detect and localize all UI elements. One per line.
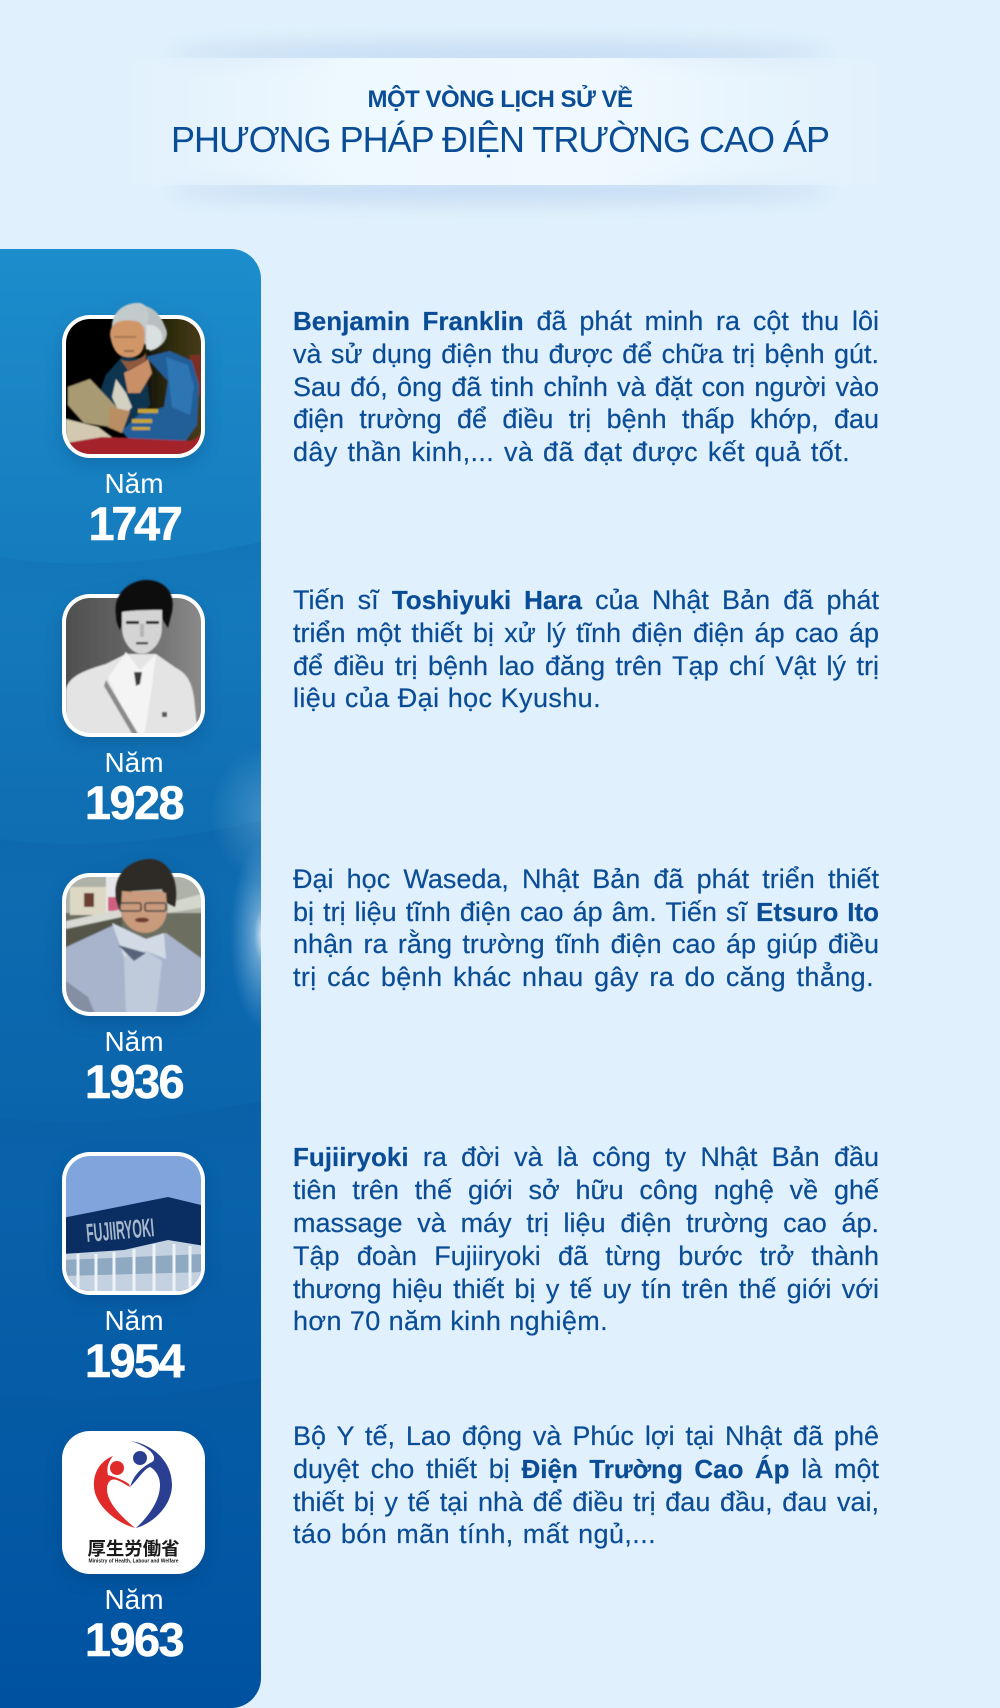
logo mark: heart of two figures (94, 1441, 172, 1528)
text block 1936: nhận ra rằng trường tĩnh điện cao áp giúp điều (293, 929, 879, 959)
year label 1936: 1936 (85, 1055, 183, 1108)
text block 1928: liệu của Đại học Kyushu. (293, 683, 601, 713)
item 1936: photo and year (60, 858, 206, 1108)
photo: Etsuro Ito portrait (60, 858, 206, 1024)
logo text: kanji name: 厚生労働省 (88, 1535, 179, 1561)
text block 1954: Fujiiryoki ra đời và là công ty Nhật Bản đầu (293, 1142, 879, 1172)
text block 1963: Bộ Y tế, Lao động và Phúc lợi tại Nhật đã phê (293, 1421, 879, 1451)
text block 1954: hơn 70 năm kinh nghiệm. (293, 1306, 608, 1336)
heading: main line: PHƯƠNG PHÁP ĐIỆN TRƯỜNG CAO ÁP (171, 119, 829, 160)
text block 1954: thương hiệu thiết bị y tế uy tín trên thế giới với (293, 1274, 879, 1304)
year label 1954: 1954 (85, 1334, 183, 1387)
text block 1954 (293, 1142, 879, 1336)
text block 1954: massage và máy trị liệu điện trường cao áp. (293, 1208, 879, 1238)
text block 1928: Tiến sĩ Toshiyuki Hara của Nhật Bản đã phát (293, 585, 879, 615)
item 1747: photo and year (58, 302, 209, 550)
text block 1954: Tập đoàn Fujiiryoki đã từng bước trở thành (293, 1241, 879, 1271)
year label 1936: Năm (104, 1026, 164, 1057)
photo: Toshiyuki Hara portrait (60, 578, 208, 745)
text block 1963: duyệt cho thiết bị Điện Trường Cao Áp là một (293, 1454, 879, 1484)
year label 1928 (85, 747, 184, 829)
year label 1928: Năm (104, 747, 164, 778)
text block 1936 (293, 864, 879, 992)
year label 1954 (85, 1305, 185, 1387)
text block 1747 (293, 306, 879, 467)
text block 1747: điện trường để điều trị bệnh thấp khớp, đau (293, 404, 879, 434)
text block 1928: để điều trị bệnh lao đăng trên Tạp chí Vật lý trị (293, 651, 879, 681)
year label 1963: Năm (104, 1584, 164, 1615)
text block 1747: dây thần kinh,... và đã đạt được kết quả tốt. (293, 437, 850, 467)
logo text: English name: Ministry of Health, Labour and Welfare (88, 1558, 179, 1564)
text block 1747: Benjamin Franklin đã phát minh ra cột thu lôi (293, 306, 879, 336)
year label 1747: 1747 (89, 497, 179, 550)
year label 1747: Năm (104, 468, 164, 499)
text block 1928 (293, 585, 879, 713)
photo: Fujiiryoki building: FUJIIRYOKI (85, 1212, 155, 1248)
year label 1936 (85, 1026, 184, 1108)
text block 1936: Đại học Waseda, Nhật Bản đã phát triển thiết (293, 864, 879, 894)
item 1928: photo and year (60, 578, 208, 829)
item 1954: photo and year (61, 1152, 206, 1387)
photo: Benjamin Franklin portrait (58, 302, 209, 467)
text block 1963: thiết bị y tế tại nhà để điều trị đau đầu, đau vai, (293, 1487, 879, 1517)
photo: Fujiiryoki building (61, 1152, 206, 1302)
panel: timeline sidebar (0, 249, 261, 1708)
text block 1747: Sau đó, ông đã tinh chỉnh và đặt con người vào (293, 372, 879, 402)
year label 1963: 1963 (85, 1613, 183, 1666)
text block 1954: tiên trên thế giới sở hữu công nghệ về ghế (293, 1175, 879, 1205)
item 1963: logo and year (62, 1431, 206, 1666)
text block 1936: trị các bệnh khác nhau gây ra do căng thẳng. (293, 962, 874, 992)
year label 1928: 1928 (85, 776, 183, 829)
heading: small line: MỘT VÒNG LỊCH SỬ VỀ (367, 86, 633, 113)
year label 1747 (89, 468, 182, 550)
text block 1928: triển một thiết bị xử lý tĩnh điện điện áp cao áp (293, 618, 879, 648)
text block 1963: táo bón mãn tính, mất ngủ,... (293, 1519, 656, 1549)
year label 1963 (85, 1584, 184, 1666)
logo: Ministry of Health, Labour and Welfare (62, 1431, 206, 1580)
year label 1954: Năm (104, 1305, 164, 1336)
text block 1963 (293, 1421, 879, 1549)
text block 1747: và sử dụng điện thu được để chữa trị bệnh gút. (293, 339, 879, 369)
text block 1936: bị trị liệu tĩnh điện cao áp âm. Tiến sĩ Etsuro Ito (293, 897, 879, 927)
title banner (171, 38, 829, 208)
